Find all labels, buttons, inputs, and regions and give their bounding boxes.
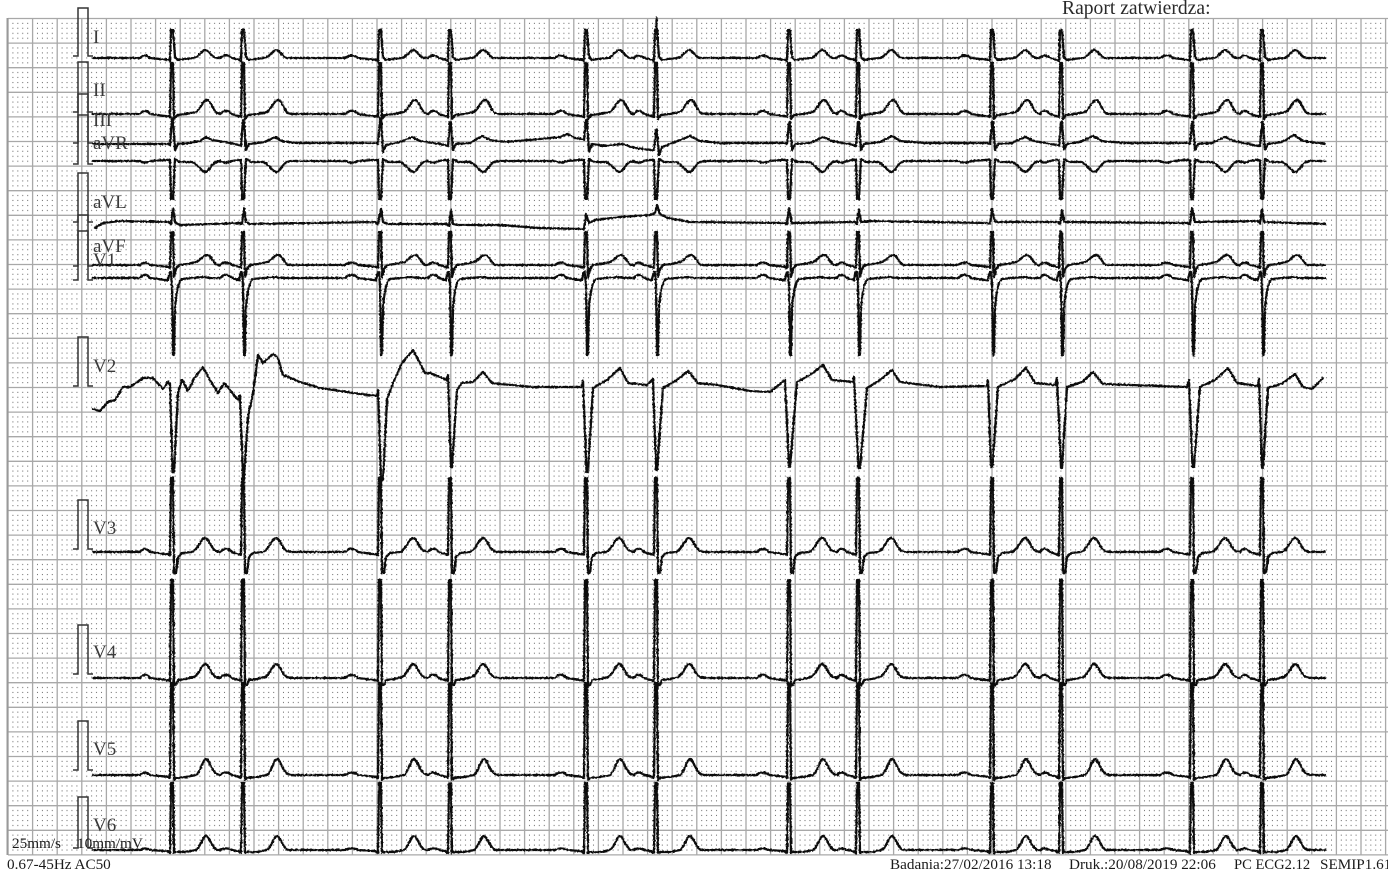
lead aVF	[73, 215, 1325, 277]
lead aVL: aVL	[93, 192, 127, 213]
lead aVR: aVR	[93, 133, 128, 154]
lead V6: V6	[93, 815, 116, 836]
lead II: II	[93, 80, 106, 101]
filter setting: 0.67-45Hz AC50	[7, 856, 111, 873]
lead III	[73, 94, 1325, 155]
lead V5: V5	[93, 739, 116, 760]
lead V1: V1	[93, 250, 116, 271]
lead aVR	[73, 115, 1325, 199]
exam date: Badania:27/02/2016 13:18	[890, 856, 1052, 873]
lead aVL	[73, 173, 1325, 229]
lead V3: V3	[93, 518, 116, 539]
lead III: III	[93, 110, 112, 131]
lead V4: V4	[93, 642, 117, 663]
print date: Druk.:20/08/2019 22:06	[1069, 856, 1216, 873]
lead I	[73, 8, 1325, 61]
paper speed setting: 25mm/s	[12, 835, 61, 852]
lead V6	[73, 783, 1325, 853]
software version: PC ECG2.12	[1234, 857, 1310, 873]
lead V3	[73, 478, 1325, 573]
lead V2: V2	[93, 356, 116, 377]
lead aVF: aVF	[93, 236, 126, 257]
gain setting: 10mm/mV	[77, 835, 143, 852]
lead V1	[73, 231, 1325, 355]
lead II	[73, 62, 1325, 119]
lead V4	[73, 580, 1325, 685]
lead I: I	[93, 27, 99, 48]
lead V5	[73, 683, 1325, 780]
lead V2	[73, 337, 1323, 480]
